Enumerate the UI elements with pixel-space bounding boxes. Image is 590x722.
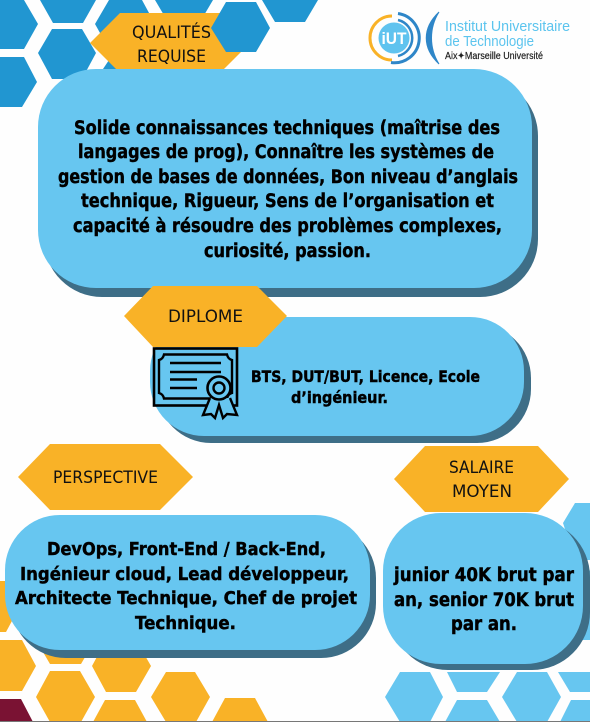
hexagon label: diplome xyxy=(124,286,287,347)
logo wordmark xyxy=(445,18,570,62)
text block: salaire xyxy=(393,565,575,635)
decorative hexagons: bottom right blue xyxy=(385,503,590,722)
text block: salaire: an, senior 70K brut xyxy=(394,590,574,611)
text block: perspective: Architecte Technique, Chef de projet xyxy=(15,588,357,609)
panel: qualités requise xyxy=(38,69,538,297)
hexagon label: qualités requise: QUALITÉS xyxy=(132,23,211,42)
text block: salaire: par an. xyxy=(451,614,517,635)
text block: qualités xyxy=(58,118,518,262)
text block: diplome: BTS, DUT/BUT, Licence, Ecole xyxy=(251,367,480,386)
logo: IUT Aix-Marseille xyxy=(370,12,570,64)
decorative hexagon over label xyxy=(211,2,270,52)
logo wordmark: de Technologie xyxy=(445,33,534,50)
text block: qualités: langages de prog), Connaître les systèmes de xyxy=(78,142,494,163)
decorative hexagons: top left blue xyxy=(0,0,318,107)
hexagon label: salaire moyen: SALAIRE xyxy=(449,458,514,477)
hexagon label: perspective: PERSPECTIVE xyxy=(53,468,158,487)
hexagon label: salaire moyen: MOYEN xyxy=(452,482,512,501)
text block: qualités: curiosité, passion. xyxy=(204,241,371,262)
hexagon label: diplome: DIPLOME xyxy=(168,307,243,326)
icon: iUT roundel xyxy=(370,14,419,63)
text block: qualités: gestion de bases de données, Bon niveau d’anglais xyxy=(58,167,518,188)
text block: diplome xyxy=(251,367,480,407)
hexagon label: perspective xyxy=(18,444,193,510)
text block: salaire: junior 40K brut par xyxy=(393,565,575,586)
text block: perspective xyxy=(15,539,357,634)
text block: perspective: Ingénieur cloud, Lead développeur, xyxy=(20,564,349,585)
icon: iUT roundel: iUT xyxy=(382,29,407,48)
icon: certificate with ribbon xyxy=(154,348,237,418)
text block: diplome: d’ingénieur. xyxy=(291,388,388,407)
text block: perspective: DevOps, Front-End / Back-End, xyxy=(47,539,326,560)
logo wordmark: Aix✦Marseille Université xyxy=(445,51,543,62)
hexagon label: qualités requise xyxy=(90,13,250,73)
text block: qualités: technique, Rigueur, Sens de l’organisation et xyxy=(81,191,494,212)
panel: salaire xyxy=(383,513,590,670)
text block: qualités: capacité à résoudre des problèmes complexes, xyxy=(73,216,502,237)
text block: qualités: Solide connaissances techniques (maîtrise des xyxy=(74,118,500,139)
panel: perspective xyxy=(5,515,376,658)
decorative hexagon: maroon xyxy=(0,699,33,722)
hexagon label: qualités requise: REQUISE xyxy=(137,47,206,66)
panel: diplome xyxy=(150,317,531,443)
hexagon label: salaire moyen xyxy=(394,446,569,512)
icon: bracket xyxy=(426,12,439,64)
text block: perspective: Technique. xyxy=(135,613,236,634)
logo wordmark: Institut Universitaire xyxy=(445,18,570,35)
decorative hexagons: bottom left orange xyxy=(0,581,268,722)
